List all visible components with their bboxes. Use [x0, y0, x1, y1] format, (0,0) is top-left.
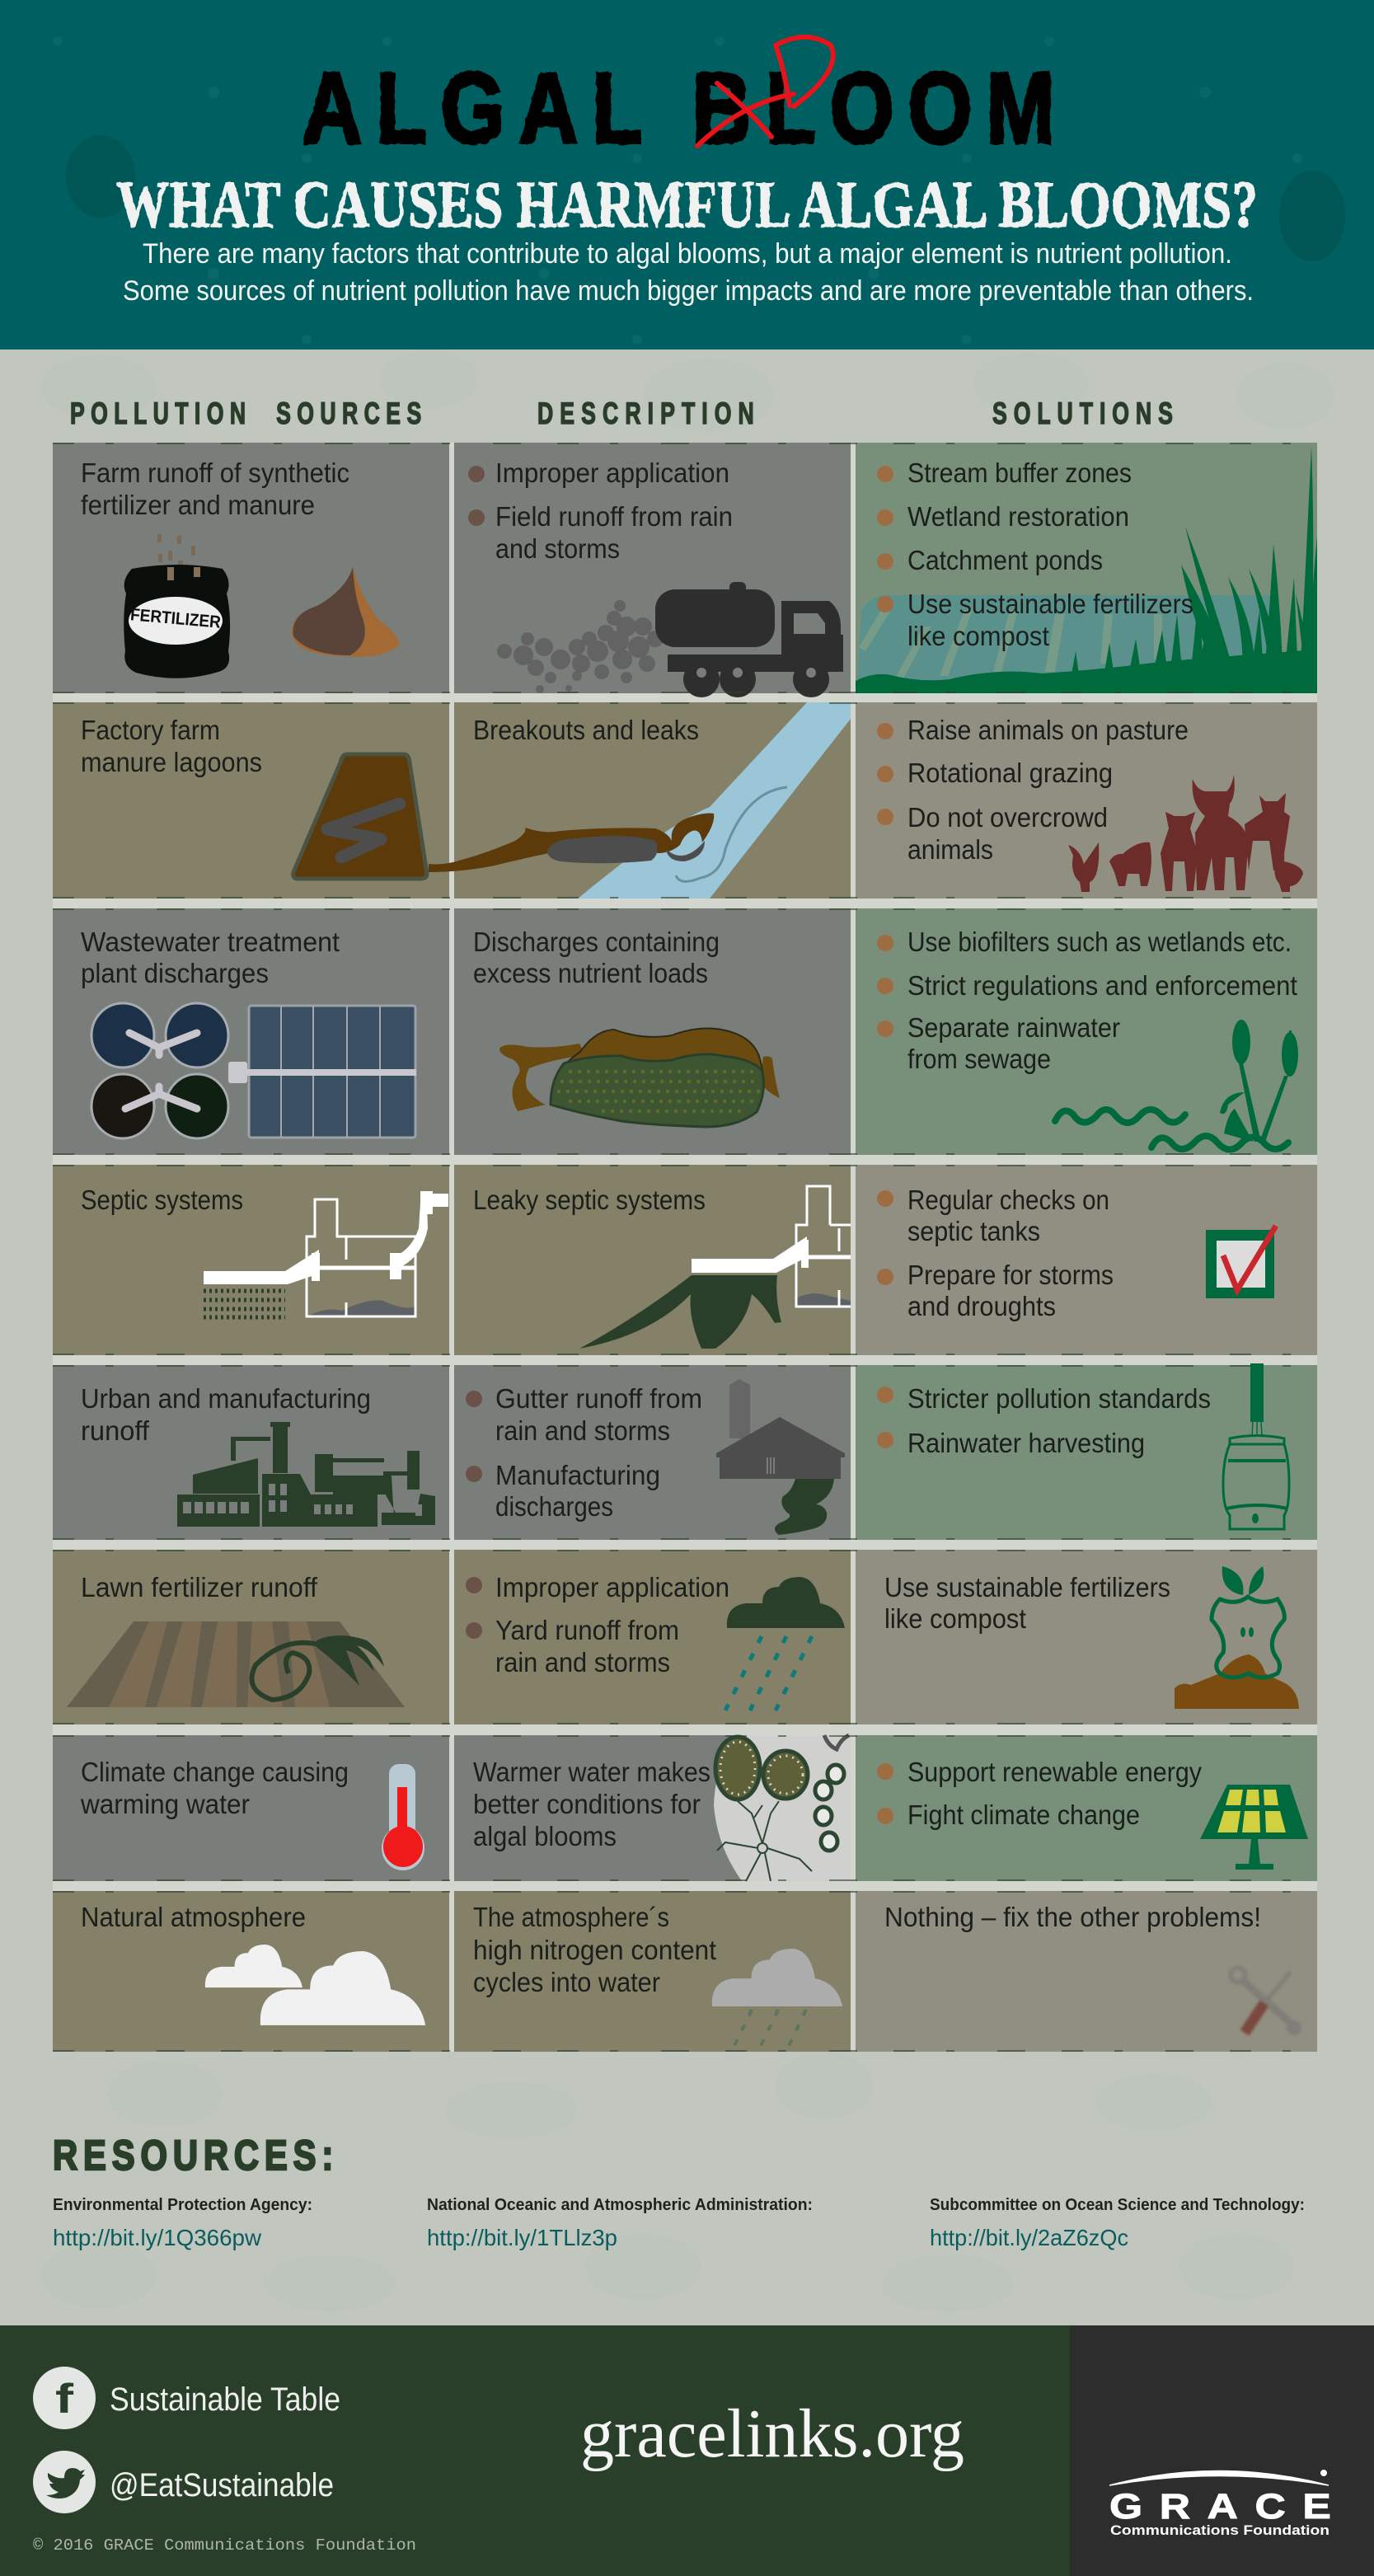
- icon: checkbox: [1206, 1226, 1276, 1298]
- text: farm runoff: fertilizer and manure: [81, 490, 315, 520]
- panel: row 3 solutions, biofilters: [856, 908, 1317, 1155]
- icon: fertilizer bag: FERTILIZER: [129, 605, 222, 632]
- icon: manure pile: [292, 567, 399, 657]
- panel: row 8 source, natural atmosphere: [53, 1891, 449, 2052]
- resource: EPA: http://bit.ly/1Q366pw: [53, 2225, 262, 2250]
- text: rotational grazing: Rotational grazing: [907, 758, 1113, 788]
- icon: grass: [856, 446, 1317, 693]
- panel: row 7 description, warmer water: [454, 1735, 851, 1881]
- text: prepare for storms: and droughts: [907, 1291, 1056, 1321]
- text: nothing fix the other problems: Nothing – fix the other problems!: [884, 1902, 1261, 1932]
- text: improper application: Improper application: [495, 457, 729, 488]
- icon: farm animals: [1068, 775, 1303, 892]
- icon: building with runoff: [716, 1379, 845, 1535]
- icon: tools: [1231, 1968, 1301, 2035]
- text: manufacturing discharges: [466, 1460, 660, 1522]
- resource: subcommittee: http://bit.ly/2aZ6zQc: [930, 2225, 1128, 2250]
- text: atmosphere nitrogen: The atmosphere´s: [473, 1902, 669, 1932]
- text: do not overcrowd: Do not overcrowd: [907, 802, 1108, 833]
- text: prepare for storms: [877, 1260, 1114, 1321]
- text: gutter runoff: rain and storms: [495, 1415, 670, 1446]
- resource: EPA: Environmental Protection Agency:: [53, 2196, 312, 2214]
- text: eat sustainable: @EatSustainable: [110, 2467, 334, 2503]
- icon: solar panel: [1200, 1785, 1308, 1870]
- icon: cattails and water: [1055, 1020, 1298, 1150]
- text: field runoff: and storms: [495, 533, 620, 564]
- resource: NOAA: http://bit.ly/1TLlz3p: [427, 2225, 617, 2250]
- logo: GRACE: [1109, 2470, 1331, 2538]
- panel: row 6 source, lawn fertilizer: [53, 1550, 449, 1724]
- text: stricter standards: Stricter pollution standards: [907, 1383, 1211, 1414]
- panel: row 1 description, farm: [454, 443, 851, 697]
- heading: solutions: SOLUTIONS: [992, 396, 1173, 430]
- text: use biofilters: Use biofilters such as wetlands etc.: [907, 927, 1292, 957]
- text: warmer water: Warmer water makes: [473, 1757, 710, 1787]
- text: warmer water: algal blooms: [473, 1821, 617, 1851]
- text: urban and manufacturing: runoff: [81, 1415, 150, 1446]
- text: warmer water: better conditions for: [473, 1789, 701, 1819]
- panel: row 8 description, atmosphere nitrogen: [454, 1891, 851, 2052]
- panel: row 5 description, gutter runoff: [454, 1365, 851, 1540]
- text: wastewater treatment plant: plant discharges: [81, 958, 269, 988]
- text: field runoff: Field runoff from rain: [495, 501, 733, 532]
- panel: row 4 solutions, checks: [856, 1165, 1317, 1355]
- text: fight climate change: Fight climate change: [907, 1799, 1140, 1830]
- panel: row 1 solutions, farm: [856, 443, 1317, 693]
- icon: treatment plant: [91, 1003, 416, 1138]
- text: wastewater treatment plant: [81, 927, 340, 988]
- resource: NOAA: [427, 2196, 813, 2250]
- text: regular checks: septic tanks: [907, 1216, 1040, 1246]
- text: yard runoff: rain and storms: [495, 1647, 670, 1677]
- text: discharges containing: [473, 927, 720, 988]
- text: breakouts and leaks: Breakouts and leaks: [473, 715, 699, 745]
- text: urban and manufacturing: [81, 1383, 371, 1446]
- panel: row 7 solutions, renewable energy: [856, 1735, 1317, 1881]
- text: leaky septic systems: Leaky septic systems: [473, 1185, 706, 1215]
- panel: row 7 source, climate change: [53, 1735, 449, 1881]
- resource: NOAA: National Oceanic and Atmospheric Administration:: [427, 2196, 813, 2214]
- icon: striped field with runoff: [67, 1621, 405, 1707]
- text: sustainable fertilizers: like compost: [907, 621, 1049, 651]
- logo: GRACE: Communications Foundation: [1110, 2522, 1329, 2538]
- text: yard runoff: [466, 1615, 679, 1677]
- text: catchment ponds: Catchment ponds: [907, 545, 1103, 575]
- text: atmosphere nitrogen: cycles into water: [473, 1967, 660, 1997]
- text: factory farm manure lagoons: manure lagoons: [81, 747, 262, 777]
- icon: facebook circle: f: [55, 2376, 73, 2422]
- panel: row 5 source, urban runoff: [53, 1365, 449, 1540]
- text: use sustainable fertilizers: Use sustainable fertilizers: [884, 1572, 1170, 1602]
- text: atmosphere nitrogen: [473, 1902, 716, 1997]
- illustration: stream: [578, 702, 851, 899]
- text: do not overcrowd: animals: [907, 834, 993, 865]
- text: sustainable fertilizers: [877, 589, 1193, 651]
- text: gutter runoff: Gutter runoff from: [495, 1383, 702, 1414]
- text: copyright: © 2016 GRACE Communications Foundation: [33, 2536, 416, 2555]
- text: natural atmosphere: Natural atmosphere: [81, 1902, 306, 1932]
- text: wetland restoration: Wetland restoration: [907, 501, 1129, 532]
- text: regular checks: [877, 1185, 1109, 1246]
- text: field runoff: [468, 501, 733, 564]
- text: atmosphere nitrogen: high nitrogen content: [473, 1935, 716, 1965]
- text: farm runoff: Farm runoff of synthetic: [81, 457, 349, 488]
- icon: manure spray: [497, 600, 664, 693]
- text: sustainable table: Sustainable Table: [110, 2381, 340, 2418]
- text: use sustainable fertilizers: [884, 1572, 1170, 1634]
- text: wastewater treatment plant: Wastewater treatment: [81, 927, 340, 957]
- panel: resources: [53, 2132, 1305, 2250]
- text block: intro line 2: Some sources of nutrient pollution have much bigger impacts and are more preventable than others.: [123, 275, 1254, 307]
- panel: row 8 solutions, nothing: [856, 1891, 1317, 2052]
- text: gracelinks.org: gracelinks.org: [580, 2395, 964, 2472]
- text: lawn fertilizer runoff: Lawn fertilizer runoff: [81, 1572, 318, 1602]
- heading: description: DESCRIPTION: [537, 396, 754, 430]
- icon: factory: [177, 1422, 435, 1527]
- text block: intro line 1: There are many factors that contribute to algal blooms, but a major element is nutrient pollution.: [143, 238, 1232, 270]
- illustration: pond and stream buffer: [857, 595, 1269, 684]
- panel: row 1 source, farm runoff: [53, 443, 449, 693]
- text: strict regulations: Strict regulations and enforcement: [907, 970, 1297, 1001]
- heading: pollution sources: POLLUTION SOURCES: [70, 396, 421, 430]
- icon: tanker truck: [655, 582, 843, 697]
- text: climate change: Climate change causing: [81, 1757, 349, 1787]
- icon: leaky septic tank: [579, 1186, 851, 1349]
- text: warmer water: [473, 1757, 710, 1851]
- text: climate change: warming water: [80, 1789, 250, 1819]
- panel: row 5 solutions, rainwater: [856, 1363, 1317, 1540]
- text: use sustainable fertilizers: like compost: [884, 1603, 1026, 1634]
- panel: row 3 source, wastewater: [53, 908, 449, 1155]
- text: separate rainwater: from sewage: [907, 1044, 1051, 1074]
- text: separate rainwater: Separate rainwater: [907, 1012, 1120, 1043]
- text: manufacturing discharges: discharges: [495, 1491, 613, 1522]
- resource: subcommittee: Subcommittee on Ocean Science and Technology:: [930, 2196, 1305, 2214]
- text: manufacturing discharges: Manufacturing: [495, 1460, 660, 1490]
- resource: EPA: [53, 2196, 312, 2250]
- icon: white clouds: [205, 1945, 425, 2025]
- text: urban and manufacturing: Urban and manufacturing: [81, 1383, 371, 1414]
- illustration: manure breakout: [429, 814, 714, 872]
- icon: twitter circle: [33, 2451, 96, 2513]
- text: factory farm manure lagoons: [81, 715, 262, 777]
- text: rainwater harvesting: Rainwater harvesting: [907, 1428, 1145, 1458]
- text: discharges containing: Discharges containing: [473, 927, 720, 957]
- icon: septic tank: [204, 1191, 448, 1317]
- text: septic systems: Septic systems: [81, 1185, 243, 1215]
- heading: resources: RESOURCES:: [53, 2132, 333, 2179]
- panel: row 6 solutions, compost: [856, 1550, 1317, 1724]
- text: farm runoff: [81, 457, 349, 520]
- panel: row 6 description, improper application: [454, 1550, 851, 1724]
- text: stream buffer zones: Stream buffer zones: [907, 457, 1132, 488]
- panel: row 2 solutions, animals: [856, 702, 1317, 899]
- icon: gray rain cloud: [712, 1949, 842, 2051]
- title: Algal Bloom: ALGAL BLOOM: [302, 52, 1055, 164]
- text: do not overcrowd: [877, 802, 1108, 865]
- icon: manure lagoon: [293, 754, 427, 879]
- panel: row 4 description, leaky septic: [454, 1165, 851, 1355]
- illustration: microscopic algae: [714, 1735, 851, 1881]
- text: sustainable fertilizers: Use sustainable fertilizers: [907, 589, 1193, 619]
- icon: fertilizer bag: [124, 534, 230, 678]
- icon: red handwritten XD correction: [697, 37, 833, 146]
- text: climate change: [80, 1757, 349, 1819]
- panel: footer: [0, 2325, 1374, 2576]
- icon: thermometer: [382, 1764, 424, 1870]
- panel: row 2 description, breakouts: [429, 702, 851, 899]
- text: yard runoff: Yard runoff from: [495, 1615, 679, 1645]
- icon: facebook circle: [33, 2367, 96, 2429]
- heading: what causes harmful algal blooms: WHAT CAUSES HARMFUL ALGAL BLOOMS?: [116, 167, 1259, 242]
- text: regular checks: Regular checks on: [907, 1185, 1109, 1215]
- panel: row 3 description, discharges: [454, 908, 851, 1155]
- panel: row 4 source, septic: [53, 1165, 449, 1355]
- resource: subcommittee: [930, 2196, 1305, 2250]
- icon: rain cloud: [725, 1577, 845, 1710]
- text: separate rainwater: [877, 1012, 1120, 1074]
- panel: logo box: [1070, 2325, 1374, 2576]
- logo: GRACE: GRACE: [1109, 2487, 1331, 2527]
- text: improper application: Improper application: [495, 1572, 729, 1602]
- text: support renewable energy: Support renewable energy: [907, 1757, 1202, 1787]
- text: discharges containing: excess nutrient loads: [473, 958, 708, 988]
- panel: header banner: [0, 0, 1374, 350]
- text: prepare for storms: Prepare for storms: [907, 1260, 1114, 1290]
- text: gutter runoff: [466, 1383, 702, 1446]
- icon: compost apple core: [1175, 1566, 1299, 1709]
- panel: row 2 source, manure lagoons: [53, 702, 449, 899]
- text: factory farm manure lagoons: Factory farm: [81, 715, 220, 745]
- icon: rain barrel: [1223, 1363, 1289, 1529]
- text: raise animals on pasture: Raise animals on pasture: [907, 715, 1189, 745]
- icon: nutrient discharge blob: [499, 1029, 780, 1127]
